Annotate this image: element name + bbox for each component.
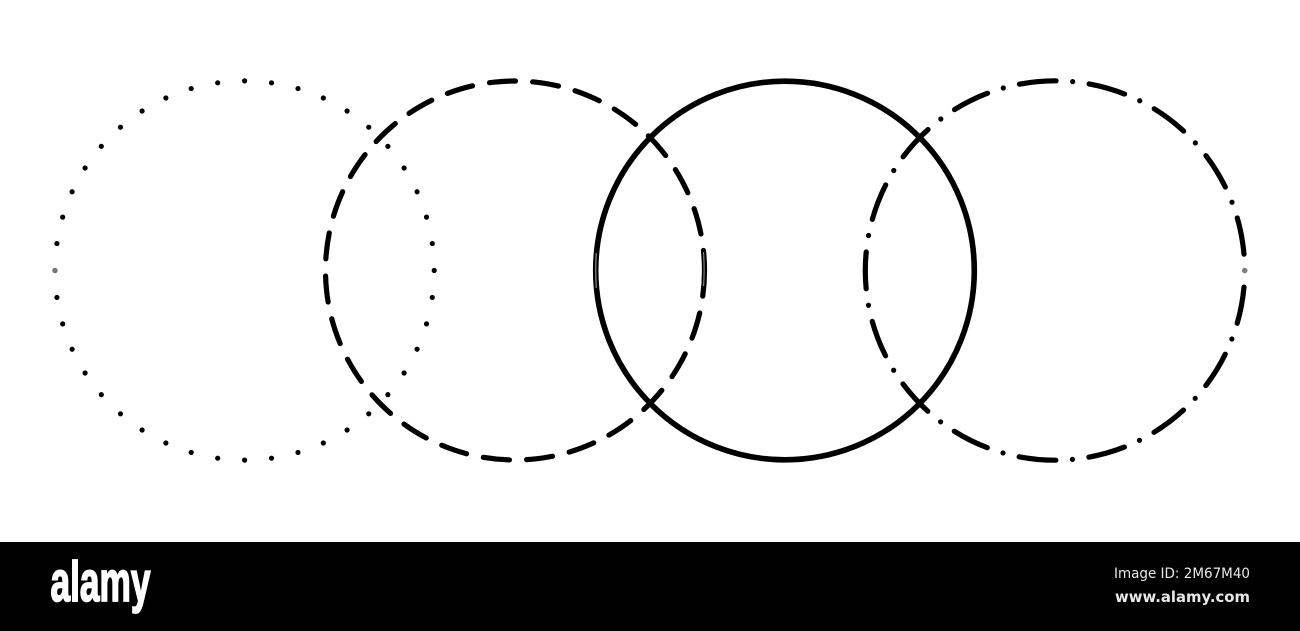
circle: dash-dot line xyxy=(865,81,1247,460)
website: www.alamy.com xyxy=(1115,588,1250,606)
logo: alamy: alamy xyxy=(50,550,151,614)
footer bar xyxy=(0,542,1300,631)
image id: Image ID: 2M67M40 xyxy=(1114,566,1250,582)
circle: dotted line xyxy=(52,81,434,460)
circle: solid line xyxy=(596,81,974,460)
circle: dashed line xyxy=(307,62,723,479)
